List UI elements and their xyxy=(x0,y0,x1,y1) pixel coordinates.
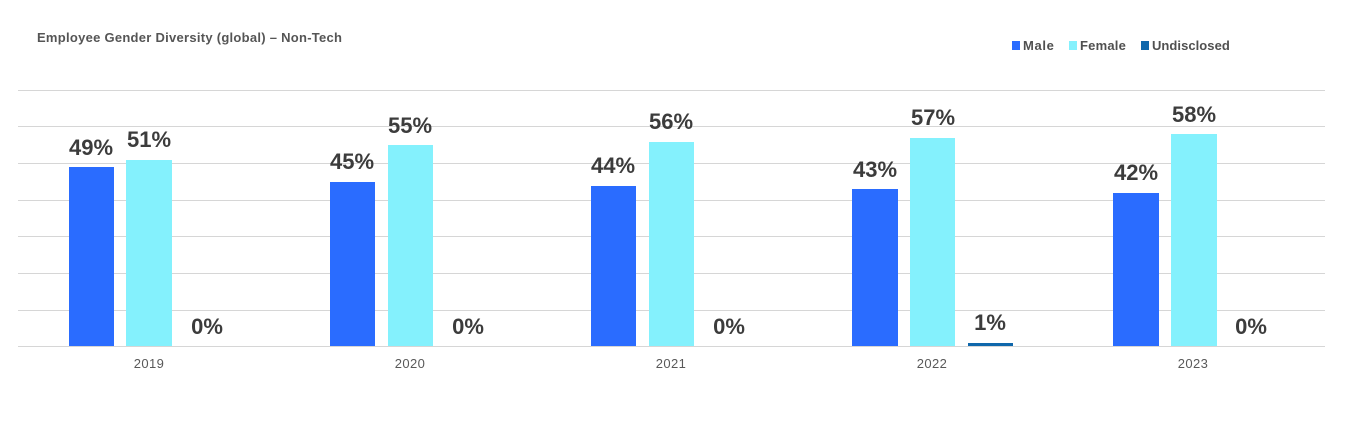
bar group: 2023: 42% xyxy=(1114,160,1158,185)
bar group: 2022: 43% xyxy=(853,157,897,182)
legend xyxy=(1012,38,1230,53)
bar group: 2019: 51% xyxy=(127,127,171,152)
bar group: 2021: 44% xyxy=(591,153,635,178)
bar group: 2021: 0% xyxy=(713,314,745,339)
bar group: 2023 xyxy=(1113,102,1267,371)
bar group: 2020: 0% xyxy=(452,314,484,339)
bar group: 2019: 2019 xyxy=(134,356,164,371)
bar group: 2019: 49% xyxy=(69,135,113,160)
title: Employee Gender Diversity (global) – Non-Tech xyxy=(37,30,342,45)
bar group: 2022: 1% xyxy=(974,310,1006,335)
bar group: 2022: 57% xyxy=(911,105,955,130)
legend: male: Male xyxy=(1023,38,1054,53)
bar group: 2021 xyxy=(591,109,745,371)
bar group: 2019 xyxy=(69,127,223,371)
bar group: 2020: 55% xyxy=(388,113,432,138)
bar group: 2023: 0% xyxy=(1235,314,1267,339)
legend: undisclosed: Undisclosed xyxy=(1152,38,1230,53)
bar group: 2023: 2023 xyxy=(1178,356,1208,371)
legend: female: Female xyxy=(1080,38,1126,53)
bar group: 2022 xyxy=(852,105,1013,371)
bar group: 2020: 2020 xyxy=(395,356,425,371)
bar group: 2020 xyxy=(330,113,484,371)
bar group: 2022: 2022 xyxy=(917,356,947,371)
bar group: 2020: 45% xyxy=(330,149,374,174)
bar group: 2021: 2021 xyxy=(656,356,686,371)
bar group: 2021: 56% xyxy=(649,109,693,134)
bar group: 2023: 58% xyxy=(1172,102,1216,127)
bar group: 2019: 0% xyxy=(191,314,223,339)
